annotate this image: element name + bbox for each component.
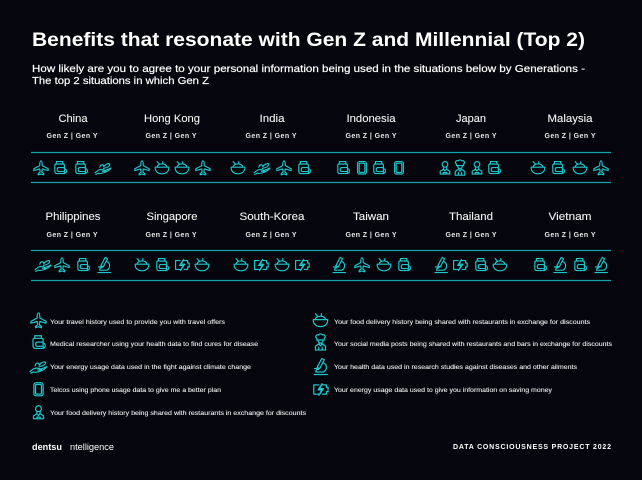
panel: bottom row of countries — [31, 211, 611, 280]
footer logo: dentsu — [32, 442, 62, 452]
subtitle: How likely are you to agree to your personal information being used in the situations below by Generations - — [32, 63, 586, 75]
India: India — [260, 113, 285, 125]
Philippines — [35, 211, 110, 273]
Taiwan: Gen Z | Gen Y — [346, 232, 397, 239]
Japan: Japan — [456, 113, 486, 125]
legend: food delivery person: Your food delivery history being shared with restaurants in exchange for discounts — [50, 410, 307, 417]
legend: food delivery bowl — [313, 314, 591, 327]
South-Korea — [234, 211, 309, 271]
legend: social media: Your social media posts being shared with restaurants and bars in exchange for discounts — [334, 341, 613, 348]
Singapore: Gen Z | Gen Y — [146, 232, 197, 239]
China: China — [58, 113, 88, 125]
legend: social media — [315, 334, 613, 350]
panel: legend left column — [30, 313, 307, 419]
Vietnam: Gen Z | Gen Y — [544, 232, 596, 239]
Vietnam: Vietnam — [548, 211, 592, 223]
subtitle — [32, 63, 586, 87]
Thailand — [435, 211, 507, 273]
Singapore: Singapore — [146, 211, 198, 223]
footer logo: ntelligence — [70, 442, 114, 452]
Taiwan — [333, 211, 410, 273]
legend: energy climate: Your energy usage data used in the fight against climate change — [50, 364, 251, 371]
China: Gen Z | Gen Y — [46, 133, 98, 140]
Philippines: Gen Z | Gen Y — [46, 232, 98, 239]
China — [34, 113, 111, 175]
South-Korea: South-Korea — [240, 211, 305, 223]
legend: medical: Medical researcher using your health data to find cures for disease — [50, 341, 258, 348]
Philippines: Philippines — [46, 211, 101, 223]
subtitle: The top 2 situations in which Gen Z — [32, 75, 210, 87]
Malaysia: Malaysia — [548, 113, 593, 125]
Hong Kong — [135, 113, 210, 175]
India — [231, 113, 310, 175]
Taiwan: Taiwan — [353, 211, 389, 223]
legend: travel — [31, 313, 226, 328]
Malaysia — [531, 113, 608, 175]
legend: food delivery bowl: Your food delivery history being shared with restaurants in exchange for discounts — [334, 319, 591, 326]
Japan: Gen Z | Gen Y — [446, 133, 497, 140]
Hong Kong: Hong Kong — [144, 113, 200, 125]
Vietnam — [535, 211, 607, 273]
Singapore — [135, 211, 209, 271]
Indonesia: Indonesia — [346, 113, 396, 125]
legend: food delivery person — [33, 406, 307, 419]
legend: energy climate — [30, 362, 251, 373]
South-Korea: Gen Z | Gen Y — [246, 232, 297, 239]
legend: energy saving: Your energy usage data used to give you information on saving money — [334, 387, 553, 394]
legend: medical — [33, 336, 258, 348]
legend: energy saving — [314, 384, 553, 395]
Malaysia: Gen Z | Gen Y — [544, 133, 596, 140]
legend: health data: Your health data used in research studies against diseases and other ailments — [334, 364, 578, 371]
Thailand: Gen Z | Gen Y — [446, 232, 497, 239]
Thailand: Thailand — [449, 211, 493, 223]
legend: telcos: Telcos using phone usage data to give me a better plan — [50, 387, 221, 394]
Indonesia — [338, 113, 403, 174]
Hong Kong: Gen Z | Gen Y — [146, 133, 197, 140]
footer logo — [32, 442, 114, 452]
panel: legend right column — [313, 314, 613, 395]
Indonesia: Gen Z | Gen Y — [346, 133, 397, 140]
Japan — [440, 113, 500, 175]
legend: health data — [314, 359, 578, 374]
legend: telcos — [34, 383, 221, 396]
India: Gen Z | Gen Y — [246, 133, 297, 140]
footer project label: DATA CONSCIOUSNESS PROJECT 2022 — [453, 444, 611, 451]
panel: top row of countries — [31, 113, 611, 182]
title: Benefits that resonate with Gen Z and Millennial (Top 2) — [32, 29, 585, 51]
legend: travel: Your travel history used to provide you with travel offers — [50, 319, 226, 326]
